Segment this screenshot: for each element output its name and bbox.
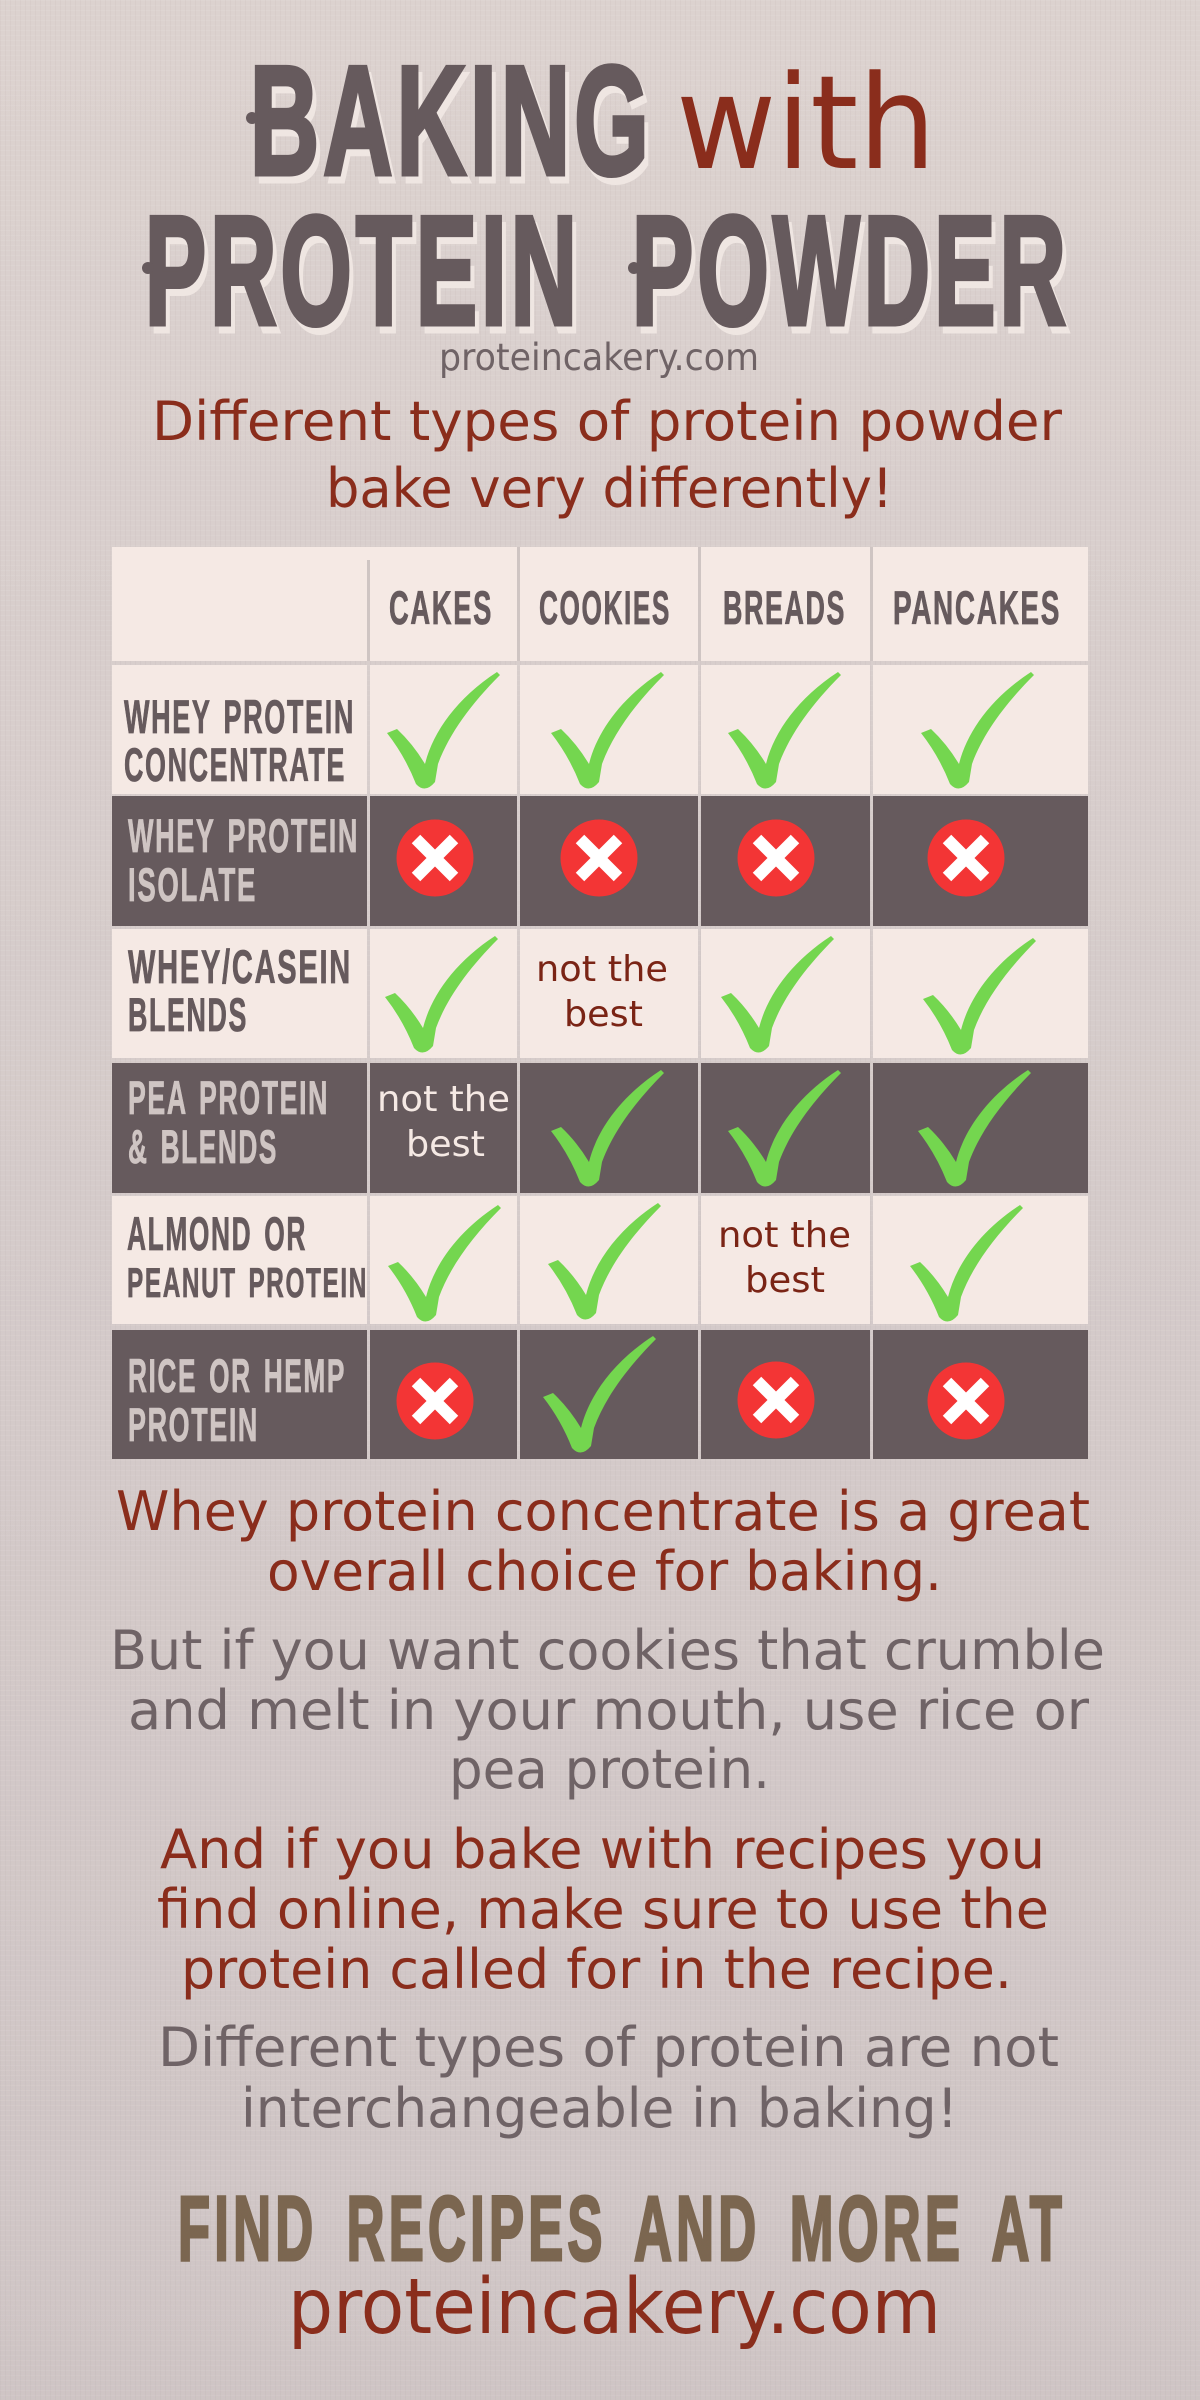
table header row: BREADS xyxy=(723,581,846,634)
row: whey protein concentrate: CONCENTRATE xyxy=(124,738,346,791)
text block: recipes online: And if you bake with recipes you xyxy=(160,1818,1045,1881)
text block: recipes online: find online, make sure to use the xyxy=(157,1878,1049,1941)
text block: not interchangeable: interchangeable in baking! xyxy=(241,2077,958,2140)
row: rice or hemp protein: RICE OR HEMP xyxy=(128,1349,346,1402)
text block: cookies that crumble: But if you want cookies that crumble xyxy=(110,1619,1105,1682)
row: pea protein and blends: not the xyxy=(377,1079,510,1120)
table header row xyxy=(112,547,1088,661)
text block: not interchangeable: Different types of protein are not xyxy=(158,2016,1059,2079)
row: whey/casein blends: WHEY/CASEIN xyxy=(128,940,352,993)
row: rice or hemp protein xyxy=(112,1330,1088,1459)
row: almond or peanut protein: PEANUT PROTEIN xyxy=(127,1259,368,1306)
title: PROTEIN: PROTEIN xyxy=(145,184,581,357)
subtitle xyxy=(152,390,1063,520)
row: whey protein isolate xyxy=(112,796,1088,926)
row: whey protein concentrate xyxy=(112,665,1088,794)
row: almond or peanut protein: ALMOND OR xyxy=(127,1207,307,1260)
row: whey/casein blends xyxy=(112,929,1088,1058)
row: rice or hemp protein: PROTEIN xyxy=(128,1398,259,1451)
title shadow: BAKING xyxy=(254,41,657,214)
footer website: proteincakery.com xyxy=(288,2263,941,2352)
text block: cookies that crumble xyxy=(110,1619,1105,1801)
text block: not interchangeable xyxy=(158,2016,1059,2140)
table header row: CAKES xyxy=(389,581,493,634)
row: almond or peanut protein: not the xyxy=(718,1215,851,1256)
text block: recipes online: protein called for in the recipe. xyxy=(181,1938,1012,2001)
title: BAKING: BAKING xyxy=(250,34,653,207)
row: pea protein and blends: best xyxy=(406,1124,485,1165)
text block: cookies that crumble: pea protein. xyxy=(449,1738,770,1801)
row: whey/casein blends: best xyxy=(564,994,643,1035)
table header row: PANCAKES xyxy=(893,581,1061,634)
title xyxy=(142,34,1074,364)
text block: recipes online xyxy=(157,1818,1049,2001)
row: almond or peanut protein: best xyxy=(745,1260,825,1301)
subtitle: Different types of protein powder xyxy=(152,390,1063,453)
text block: whey concentrate: Whey protein concentrate is a great xyxy=(116,1480,1090,1543)
title shadow xyxy=(149,41,1074,364)
row: almond or peanut protein xyxy=(112,1196,1088,1324)
row: whey/casein blends: BLENDS xyxy=(128,988,248,1041)
text block: whey concentrate xyxy=(116,1480,1090,1603)
row: pea protein and blends: PEA PROTEIN xyxy=(128,1071,329,1124)
row: whey protein concentrate: WHEY PROTEIN xyxy=(124,690,355,743)
subtitle: bake very differently! xyxy=(326,457,893,520)
row: whey protein isolate: ISOLATE xyxy=(128,858,257,911)
comparison table xyxy=(112,547,1088,1459)
title: with: with xyxy=(676,47,936,199)
table header row: COOKIES xyxy=(539,581,671,634)
row: pea protein and blends xyxy=(112,1063,1088,1193)
text block: cookies that crumble: and melt in your mouth, use rice or xyxy=(128,1679,1090,1742)
title shadow: PROTEIN xyxy=(149,191,585,364)
row: whey protein isolate: WHEY PROTEIN xyxy=(128,809,359,862)
row: whey/casein blends: not the xyxy=(536,949,668,990)
row: pea protein and blends: & BLENDS xyxy=(128,1120,278,1173)
website line: proteincakery.com xyxy=(439,336,759,379)
text block: whey concentrate: overall choice for baking. xyxy=(267,1540,942,1603)
